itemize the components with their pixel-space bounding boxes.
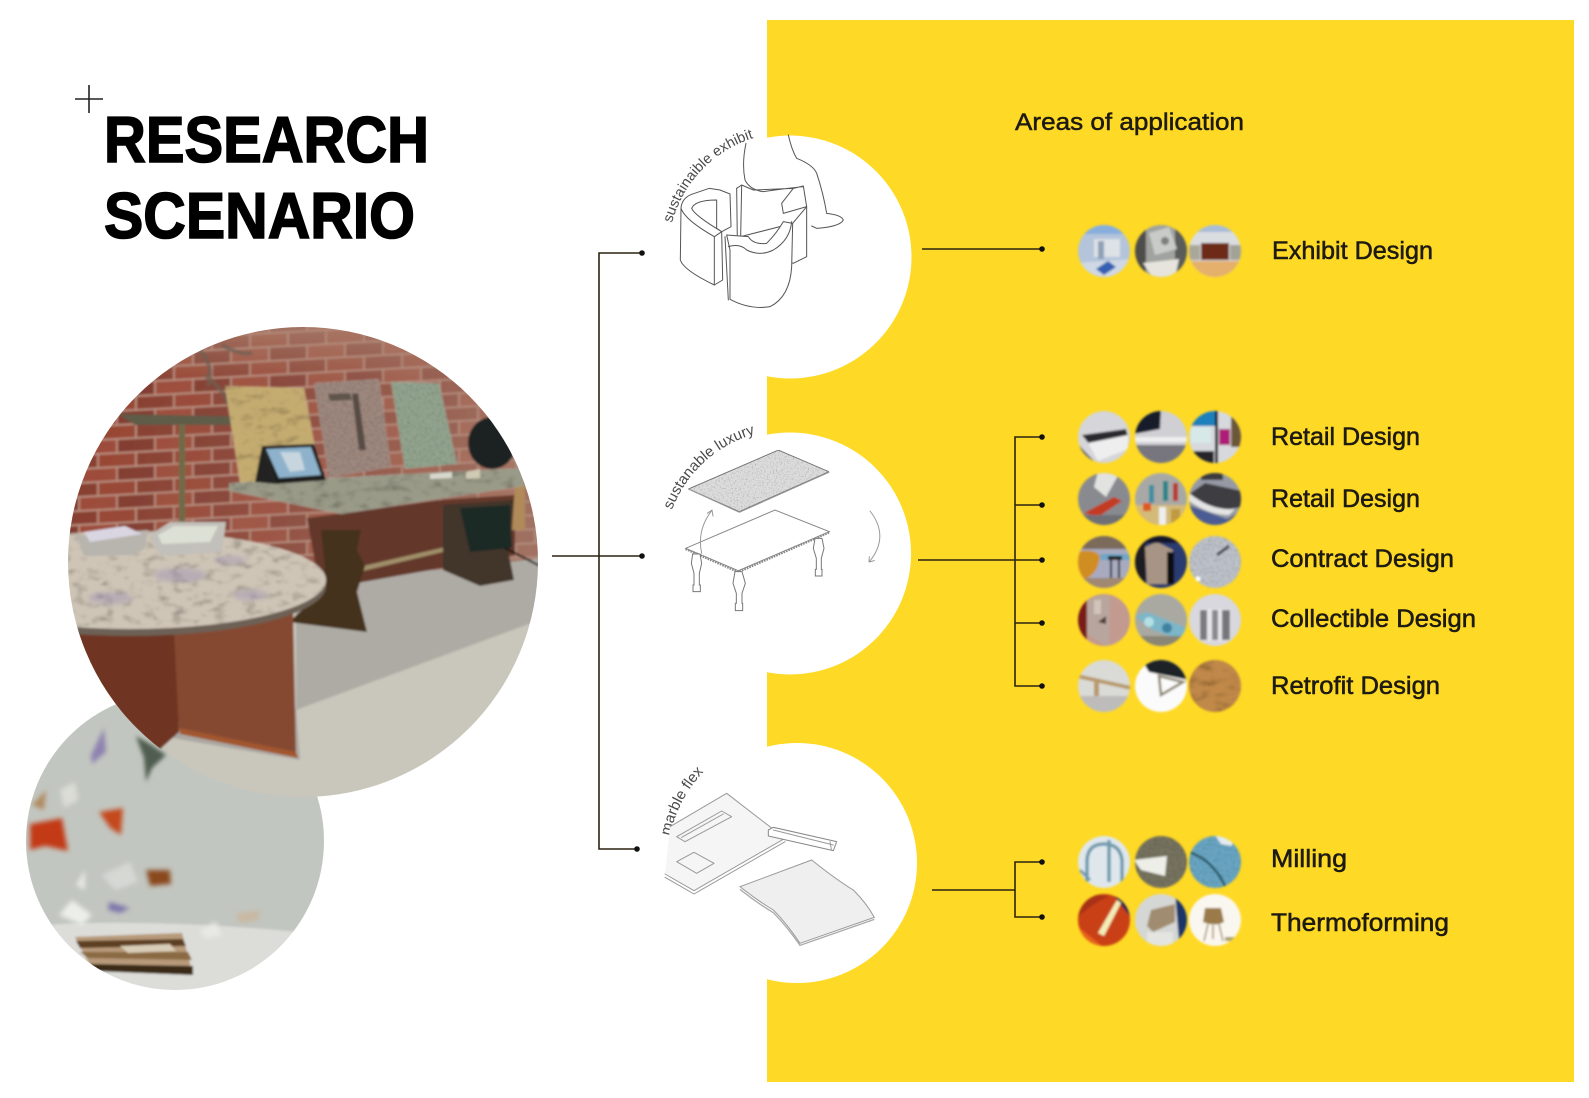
row: Thermoforming (1077, 893, 1449, 947)
thumbnail 2 (1134, 410, 1188, 464)
label: Retail Design (1271, 423, 1420, 451)
title line 1: RESEARCH (104, 103, 429, 176)
small photo: falling marble fragments (26, 704, 324, 990)
thumbnail 3 (1188, 593, 1242, 647)
label: Collectible Design (1271, 605, 1476, 633)
thumbnail 3 (1188, 893, 1242, 947)
thumbnail 1 (1077, 535, 1131, 589)
tablet (255, 444, 326, 484)
round marble table top (68, 530, 328, 637)
curved label: sustanable luxury (665, 426, 753, 509)
main photo: marble tables against brick wall (68, 327, 538, 796)
black bag (468, 417, 516, 469)
white circle (669, 432, 911, 674)
thumbnail 2 (1134, 472, 1188, 526)
yellow panel (767, 20, 1574, 1082)
leaning marble panels (225, 379, 457, 483)
row: Retrofit Design (1077, 659, 1440, 713)
thumbnail 3 (1188, 472, 1242, 526)
title line 2: SCENARIO (104, 179, 415, 252)
panel: sustainable luxury (665, 426, 911, 674)
thumbnail 2 (1134, 835, 1188, 889)
illustration: flexible marble sheet (665, 793, 874, 945)
row: Milling (1077, 835, 1347, 889)
thumbnail 1 (1077, 593, 1131, 647)
title (75, 85, 429, 252)
thumbnail 1 (1077, 893, 1131, 947)
main connector bracket (552, 250, 645, 852)
row: Collectible Design (1077, 593, 1476, 647)
side table (120, 414, 232, 523)
connector: exhibit (922, 246, 1045, 252)
thumbnail 3 (1188, 659, 1242, 713)
panel: sustainable exhibit (665, 130, 912, 378)
thumbnail 3 (1188, 535, 1242, 589)
trays with fragments (77, 522, 226, 556)
illustration: table with marble top (686, 450, 880, 611)
thumbnail 1 (1077, 835, 1131, 889)
white circle (668, 136, 912, 378)
label: Retail Design (1271, 485, 1420, 513)
brick wall (70, 327, 538, 572)
under table (289, 485, 540, 632)
thumbnail 3 (1188, 224, 1242, 278)
thumbnail 1 (1077, 224, 1131, 278)
white circle (677, 743, 917, 983)
thumbnail 2 (1134, 659, 1188, 713)
label: Thermoforming (1271, 909, 1449, 937)
label: Milling (1271, 845, 1347, 873)
row: Contract Design (1077, 535, 1454, 589)
thumbnail 2 (1134, 535, 1188, 589)
thumbnail 2 (1134, 593, 1188, 647)
label: Contract Design (1271, 545, 1454, 573)
row: Retail Design 1 (1077, 410, 1420, 464)
thumbnail 1 (1077, 659, 1131, 713)
connector: flex bracket (932, 859, 1045, 920)
thumbnail 2 (1134, 893, 1188, 947)
thumbnail 2 (1134, 224, 1188, 278)
connector: luxury bracket (918, 434, 1045, 689)
icon: plus sign (75, 85, 103, 113)
illustration: modular seat with seated figure (680, 135, 843, 307)
label: Retrofit Design (1271, 672, 1440, 700)
thumbnail 1 (1077, 410, 1131, 464)
curved label: marble flex (662, 766, 704, 835)
round table base (60, 610, 298, 758)
floor (160, 558, 538, 796)
row: Exhibit Design (1077, 224, 1433, 278)
thumbnail 1 (1077, 472, 1131, 526)
thumbnail 3 (1188, 835, 1242, 889)
thumbnail 3 (1188, 410, 1242, 464)
curved label: sustainaible exhibit (665, 130, 754, 222)
label: Exhibit Design (1272, 237, 1433, 265)
long marble table top (229, 468, 524, 514)
marble slab (75, 933, 193, 975)
panel: marble flex (662, 743, 917, 983)
green fragment over photo (136, 736, 166, 782)
heading: areas of application: Areas of application (1015, 109, 1244, 136)
row: Retail Design 2 (1077, 472, 1420, 526)
